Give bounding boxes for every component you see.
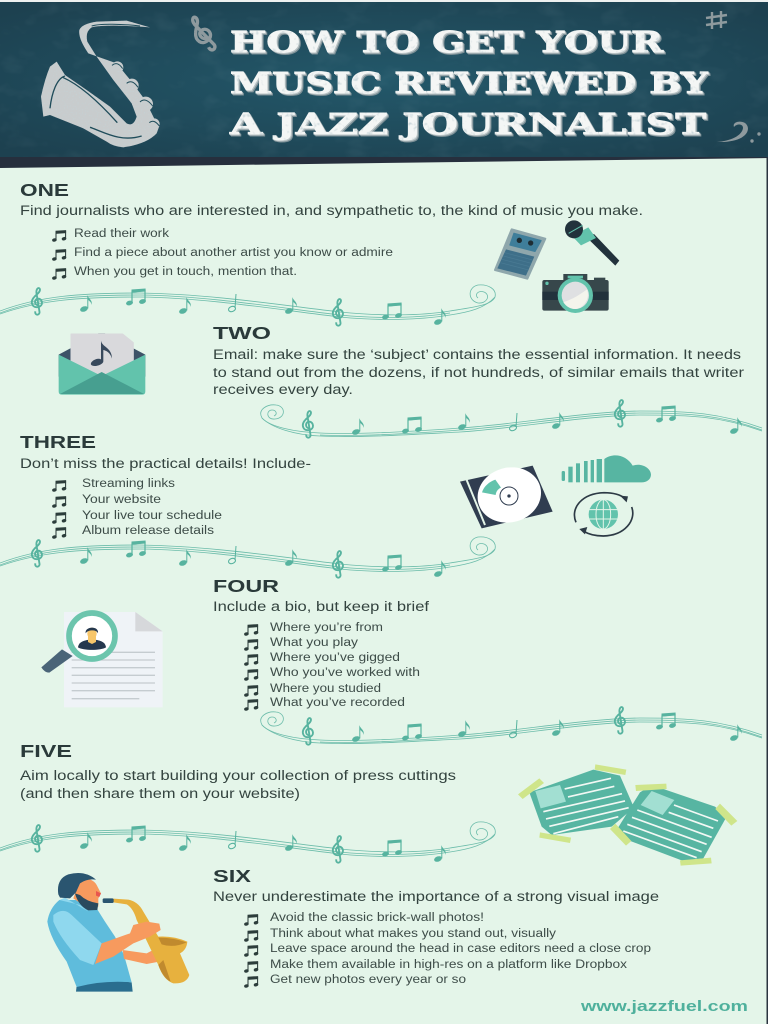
text: step four intro: Include a bio, but keep it brief: [213, 599, 429, 614]
text: step six intro: Never underestimate the importance of a strong visual image: [213, 889, 659, 904]
list: step six bullets: [244, 912, 651, 988]
list: step one bullets: When you get in touch, mention that.: [74, 266, 297, 278]
icon: bio document with magnifier: [41, 612, 163, 707]
heading: five: FIVE: [20, 741, 72, 761]
list: step three bullets: Your live tour schedule: [82, 510, 222, 522]
list: step one bullets: [52, 228, 393, 280]
panel: step two: [59, 323, 762, 438]
icon: treble clef: [186, 15, 219, 54]
text: step two body: receives every day.: [213, 382, 353, 397]
panel: step one: [0, 180, 643, 326]
list: step three bullets: Streaming links: [82, 478, 175, 490]
icon: press cuttings: [518, 764, 737, 866]
icon: bass clef: [717, 122, 761, 143]
panel: step five: [0, 741, 737, 866]
list: step six bullets: Get new photos every year or so: [270, 974, 466, 986]
panel: step three: [0, 432, 651, 578]
list: step one bullets: Find a piece about another artist you know or admire: [74, 247, 393, 259]
icon: compact disc: [460, 460, 553, 530]
icon: saxophone: [41, 21, 160, 147]
decorative music staff five: [0, 822, 495, 863]
list: step four bullets: Where you studied: [270, 683, 381, 695]
text: step five body: Aim locally to start building your collection of press cuttings: [20, 768, 456, 783]
list: step three bullets: Your website: [82, 494, 161, 506]
icon: globe with arrows: [574, 493, 633, 536]
list: step three bullets: [52, 478, 222, 539]
list: step four bullets: What you play: [270, 637, 358, 649]
illustration: saxophone player: [47, 873, 189, 992]
heading: six: SIX: [213, 866, 251, 886]
text: step five body: (and then share them on your website): [20, 786, 300, 801]
list: step six bullets: Think about what makes you stand out, visually: [270, 928, 556, 940]
icon: sharp sign: [706, 11, 727, 29]
list: step six bullets: Leave space around the head in case editors need a close crop: [270, 943, 651, 955]
decorative music staff three: [0, 537, 495, 578]
heading: two: TWO: [213, 323, 271, 343]
title: [229, 25, 708, 141]
panel: step four: [41, 576, 762, 745]
text: step three intro: Don’t miss the practical details! Include-: [20, 456, 311, 471]
footer website link: www.jazzfuel.com: [580, 998, 748, 1015]
panel: step six: [47, 866, 659, 992]
header banner: [0, 0, 768, 168]
text: step two body: to stand out from the dozens, if not hundreds, of similar emails that writer: [213, 365, 745, 380]
icon: camera: [542, 274, 609, 313]
list: step three bullets: Album release details: [82, 525, 214, 537]
text: step two body: Email: make sure the ‘subject’ contains the essential information. It needs: [213, 347, 741, 362]
icon: microphone: [565, 220, 619, 266]
text: step five body: [20, 768, 456, 801]
heading: one: ONE: [20, 180, 69, 200]
list: step four bullets: [244, 622, 420, 711]
title: A JAZZ JOURNALIST: [229, 107, 707, 141]
list: step one bullets: Read their work: [74, 228, 169, 240]
decorative music staff one: [0, 285, 495, 326]
title: MUSIC REVIEWED BY: [230, 66, 708, 100]
icon: tape recorder: [495, 229, 545, 279]
decorative music staff four: [261, 707, 762, 745]
list: step four bullets: Where you’re from: [270, 622, 383, 634]
list: step six bullets: Avoid the classic brick-wall photos!: [270, 912, 484, 924]
icon: cloud streaming: [562, 455, 651, 482]
list: step four bullets: What you’ve recorded: [270, 697, 405, 709]
text: step one intro: Find journalists who are interested in, and sympathetic to, the kind of music you make.: [20, 203, 643, 218]
heading: three: THREE: [20, 432, 96, 452]
title: HOW TO GET YOUR: [230, 25, 664, 59]
list: step six bullets: Make them available in high-res on a platform like Dropbox: [270, 959, 627, 971]
text: step two body: [213, 347, 745, 397]
list: step four bullets: Who you’ve worked with: [270, 667, 420, 679]
icon: envelope with note: [59, 333, 145, 395]
list: step four bullets: Where you’ve gigged: [270, 652, 400, 664]
decorative music staff two: [261, 400, 762, 438]
heading: four: FOUR: [213, 576, 279, 596]
